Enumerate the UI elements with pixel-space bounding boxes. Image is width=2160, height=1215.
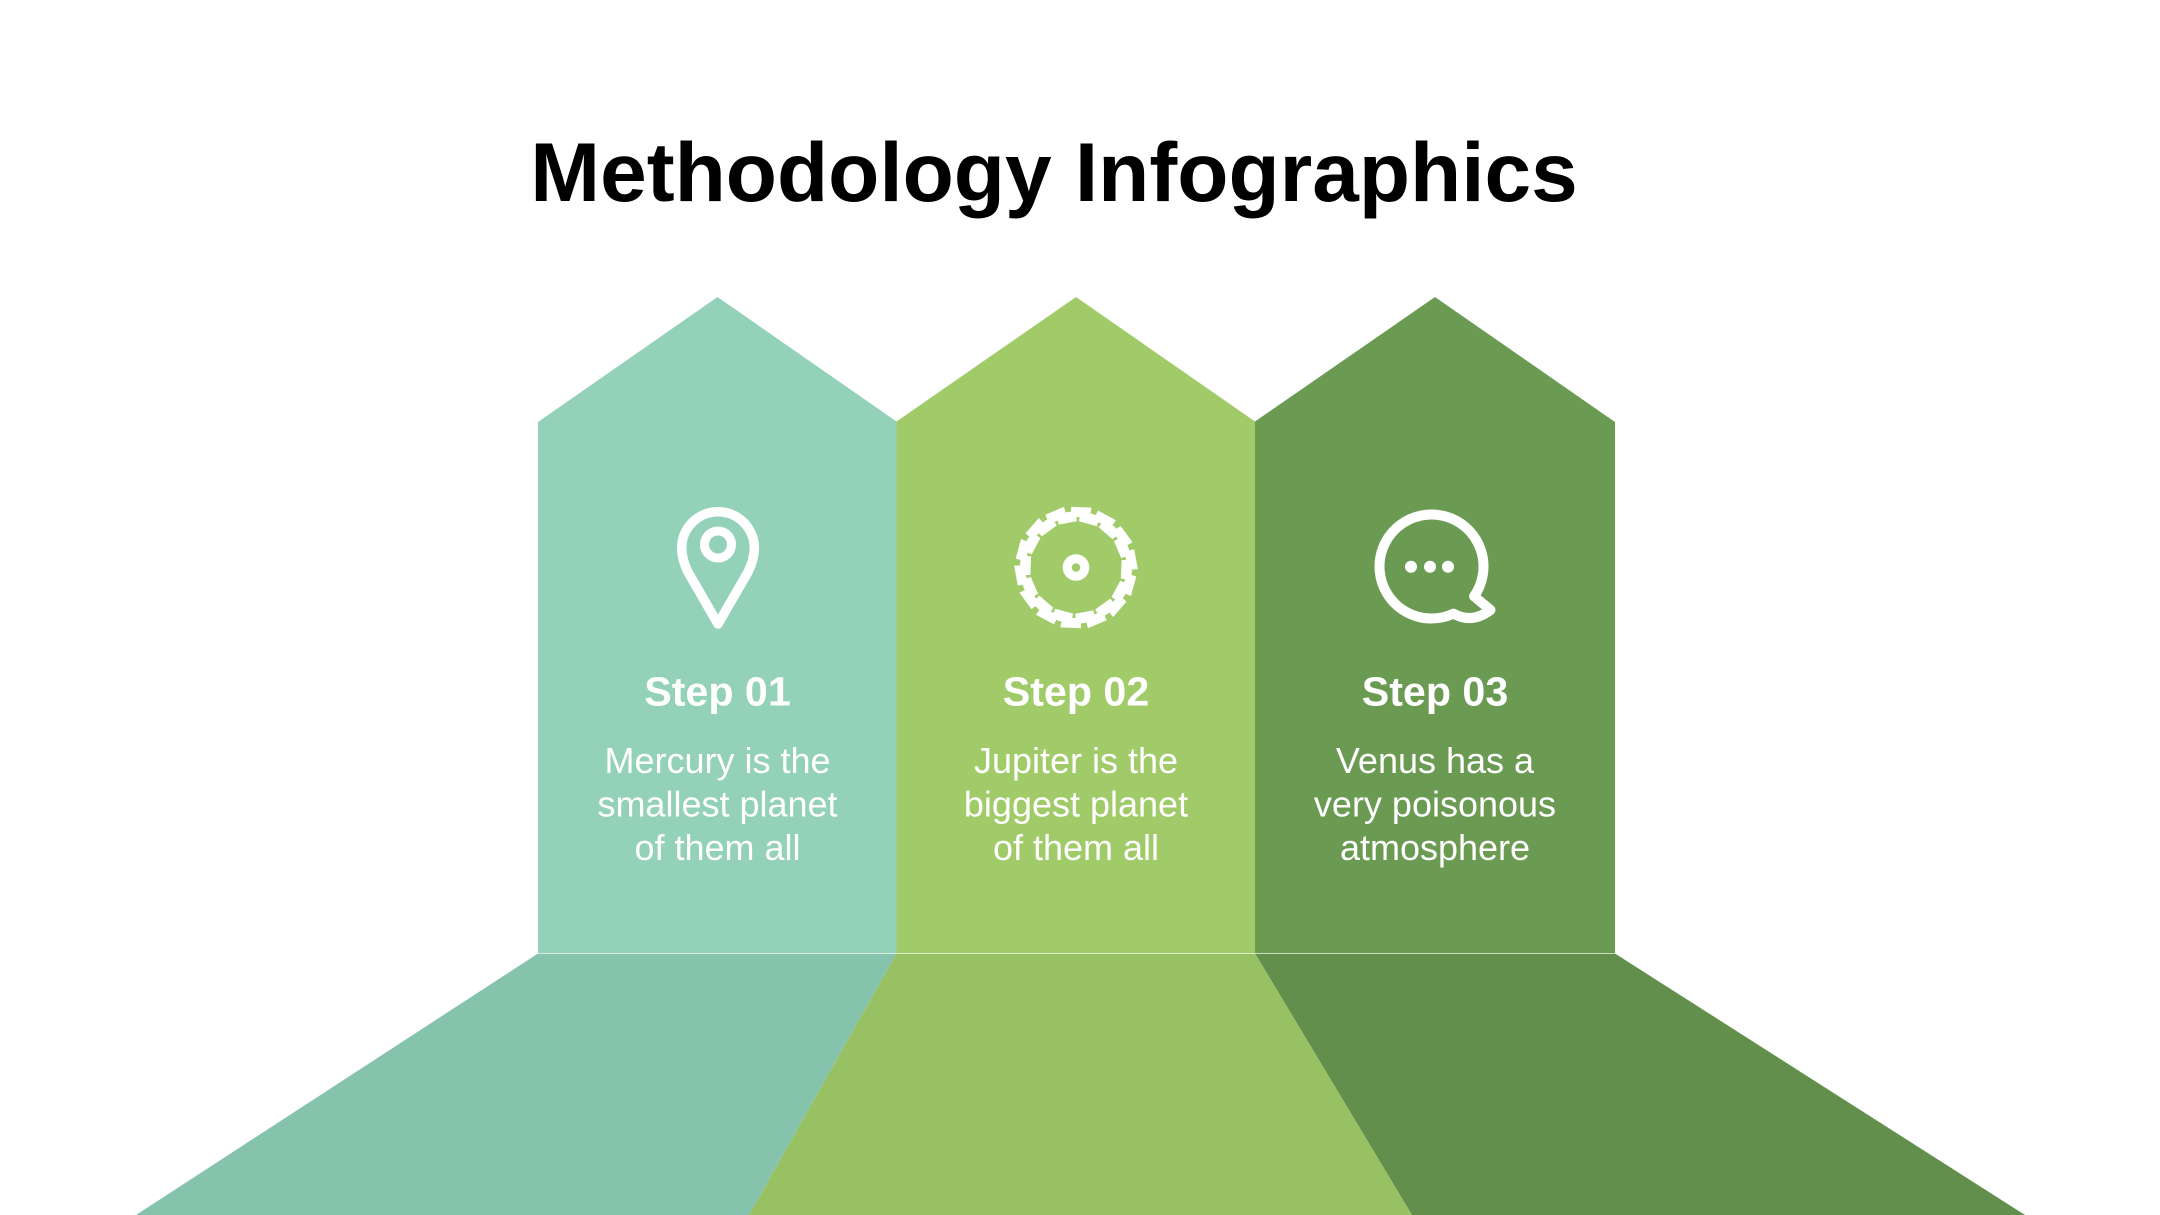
panel: step 01 (538, 297, 896, 953)
text block: step 03: Venus has a (1336, 740, 1535, 781)
icon: speech bubble (1379, 514, 1490, 618)
text block: step 01: smallest planet (597, 784, 838, 824)
text block: step 02: Jupiter is the (974, 740, 1178, 781)
panel: step 02 (896, 297, 1255, 953)
panel: step 03 (1255, 297, 1615, 953)
text block: step 02: of them all (993, 827, 1159, 868)
text block: step 01: of them all (634, 827, 801, 868)
title: Methodology Infographics (530, 125, 1578, 219)
text block: step 03: atmosphere (1340, 827, 1530, 868)
text block: step 02: biggest planet (964, 784, 1188, 824)
text block: step 03: very poisonous (1314, 784, 1556, 824)
icon: gear (1018, 510, 1134, 625)
arrow shape: step 03 (1255, 297, 1615, 953)
heading: step 01: Step 01 (644, 668, 791, 714)
floor panel: step 03 base (1255, 954, 2025, 1215)
text block: step 03 (1314, 740, 1556, 868)
arrow shape: step 01 (538, 297, 896, 953)
icon: location pin (682, 512, 754, 624)
text block: step 02 (964, 740, 1188, 868)
text block: step 01: Mercury is the (604, 740, 831, 781)
arrow shape: step 02 (896, 297, 1255, 953)
floor panel: step 01 base (136, 954, 896, 1215)
heading: step 03: Step 03 (1362, 668, 1508, 714)
heading: step 02: Step 02 (1003, 668, 1149, 714)
floor panel: step 02 base (749, 954, 1412, 1215)
text block: step 01 (597, 740, 838, 868)
